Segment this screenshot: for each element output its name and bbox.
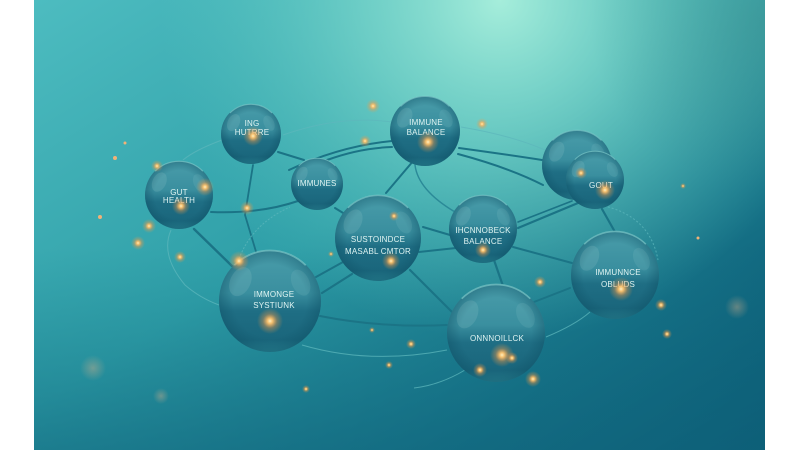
sphere: immune system: SYSTIUNK — [253, 301, 295, 310]
sphere: centre: MASABL CMTOR — [345, 247, 411, 256]
sphere: gut health: HEALTH — [163, 196, 195, 205]
sphere: immune balance — [390, 96, 460, 166]
sphere: front right: GOUT — [589, 181, 613, 190]
sphere: front right — [566, 151, 624, 209]
sphere: lower right: OBLUDS — [601, 280, 635, 289]
sphere: top left: HUTRRE — [235, 128, 269, 137]
sphere: immune balance: IMMUNE — [409, 118, 443, 127]
glowing nodes — [80, 99, 749, 404]
sphere: small centre: IMMUNES — [297, 179, 337, 188]
sphere: balance: IHCNNOBECK — [455, 226, 511, 235]
connection lines — [194, 141, 615, 326]
sphere: top left — [221, 104, 281, 164]
sphere: immune balance: BALANCE — [407, 128, 445, 137]
sphere: small centre — [291, 158, 343, 210]
sphere: balance — [449, 195, 517, 263]
sphere: lower right — [571, 231, 659, 319]
sphere: back right — [542, 130, 612, 200]
sphere: immune system: IMMONGE — [254, 290, 294, 299]
sphere: bottom: ONNNOILLCK — [470, 334, 524, 343]
sphere: gut health: GUT — [170, 188, 188, 197]
sphere: immune system — [219, 250, 321, 352]
sphere: balance: BALANCE — [464, 237, 502, 246]
sphere: bottom — [447, 284, 545, 382]
sphere: centre — [335, 195, 421, 281]
sphere: top left: ING — [245, 119, 259, 128]
sphere: gut health — [145, 161, 213, 229]
sphere: centre: SUSTOINDCE — [351, 235, 405, 244]
orbit rings — [168, 120, 658, 388]
sphere: lower right: IMMUNNCE — [595, 268, 641, 277]
